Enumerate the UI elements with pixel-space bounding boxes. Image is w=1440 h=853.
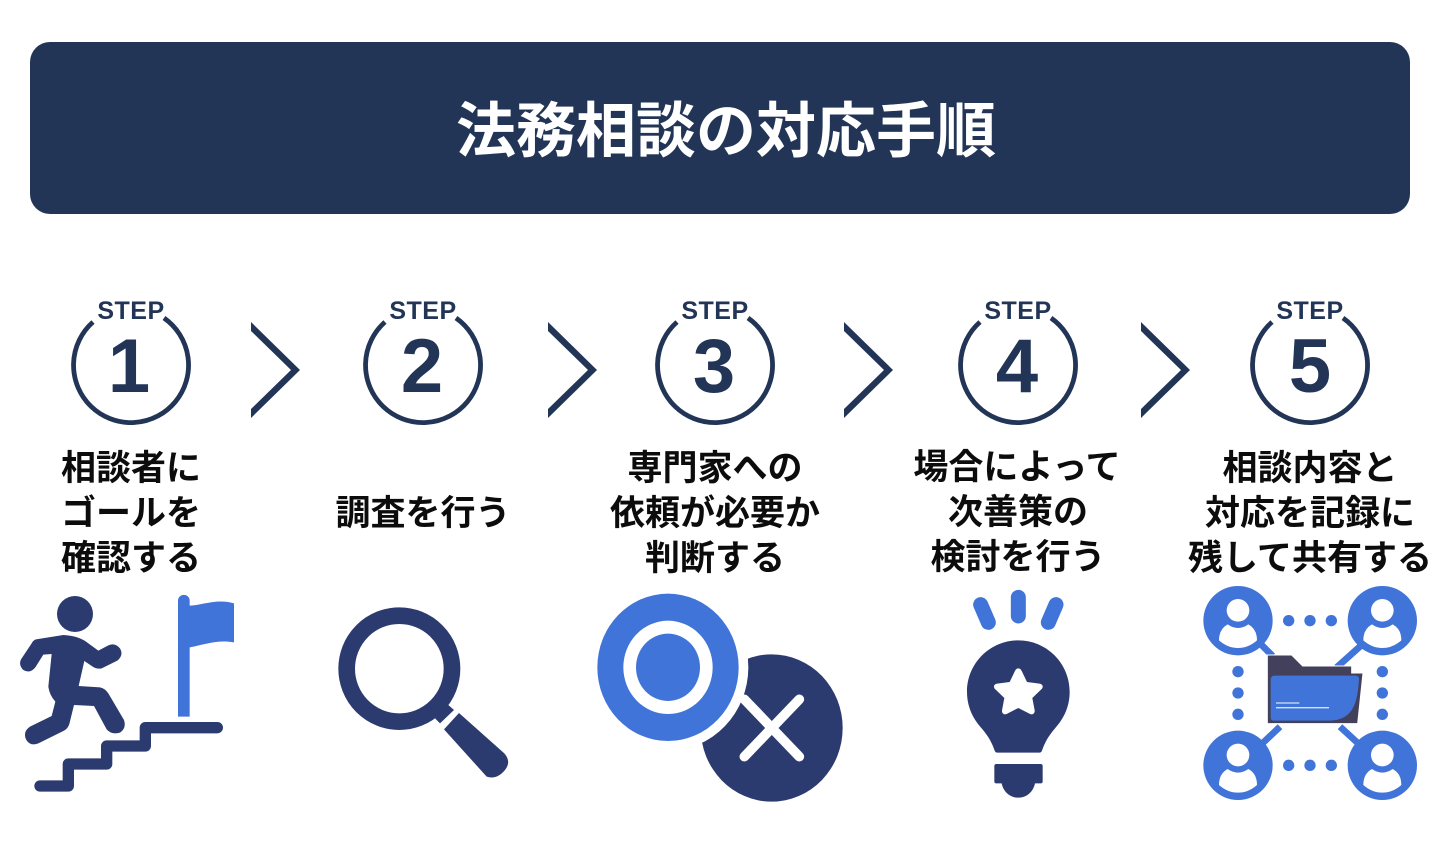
step 1 text: 相談者に: [61, 440, 201, 491]
step 1 badge: [74, 297, 189, 423]
step 4 badge: STEP: [984, 297, 1052, 325]
icon: light bulb with star: [967, 597, 1070, 798]
step 2 badge: [366, 297, 481, 423]
step 3 text: 専門家への: [627, 440, 803, 491]
step 2 badge: 2: [401, 324, 443, 409]
step 2 badge: STEP: [389, 297, 457, 325]
arrow 4: [1141, 322, 1190, 418]
step 5 text: 相談内容と: [1222, 440, 1398, 491]
step 4 text: 場合によって: [913, 439, 1121, 490]
icon: magnifying glass: [347, 616, 508, 777]
step 3 text: 依頼が必要か: [610, 485, 820, 536]
step 5 text: 対応を記録に: [1205, 485, 1415, 536]
folder: [1267, 655, 1363, 724]
dots: [1232, 615, 1388, 771]
icon: people sharing a folder: [1203, 586, 1417, 800]
title banner: [30, 42, 1410, 214]
step 4 text: 次善策の: [948, 484, 1088, 535]
step 4 text: 検討を行う: [930, 529, 1106, 580]
step 2 text: 調査を行う: [335, 485, 511, 536]
step 5 badge: STEP: [1276, 297, 1344, 325]
person bottom left: [1203, 731, 1273, 800]
icon: runner climbing stairs to flag: [20, 595, 234, 786]
step 3 badge: 3: [693, 324, 735, 409]
arrow 3: [844, 322, 893, 418]
arrow 1: [251, 322, 300, 418]
person bottom right: [1348, 731, 1417, 800]
icon: circle and cross: [588, 584, 843, 802]
step 3 text: 判断する: [645, 530, 785, 581]
step 1 badge: 1: [108, 324, 150, 409]
title: 法務相談の対応手順: [456, 83, 996, 170]
step 1 badge: STEP: [97, 297, 165, 325]
step 5 badge: 5: [1289, 324, 1331, 409]
step 1 text: 確認する: [61, 530, 201, 581]
step 3 text: [610, 440, 820, 581]
arrow 2: [548, 322, 597, 418]
person top right: [1348, 586, 1417, 655]
person top left: [1203, 586, 1273, 655]
step 4 badge: [961, 297, 1076, 423]
step 3 badge: STEP: [681, 297, 749, 325]
step 4 text: [913, 439, 1121, 580]
step 5 text: [1188, 440, 1432, 581]
step 3 badge: [658, 297, 773, 423]
step 1 text: ゴールを: [61, 485, 201, 536]
connector lines: [1260, 643, 1362, 746]
step 5 badge: [1253, 297, 1368, 423]
step 4 badge: 4: [996, 324, 1038, 409]
step 5 text: 残して共有する: [1188, 530, 1432, 581]
step 1 text: [61, 440, 201, 581]
